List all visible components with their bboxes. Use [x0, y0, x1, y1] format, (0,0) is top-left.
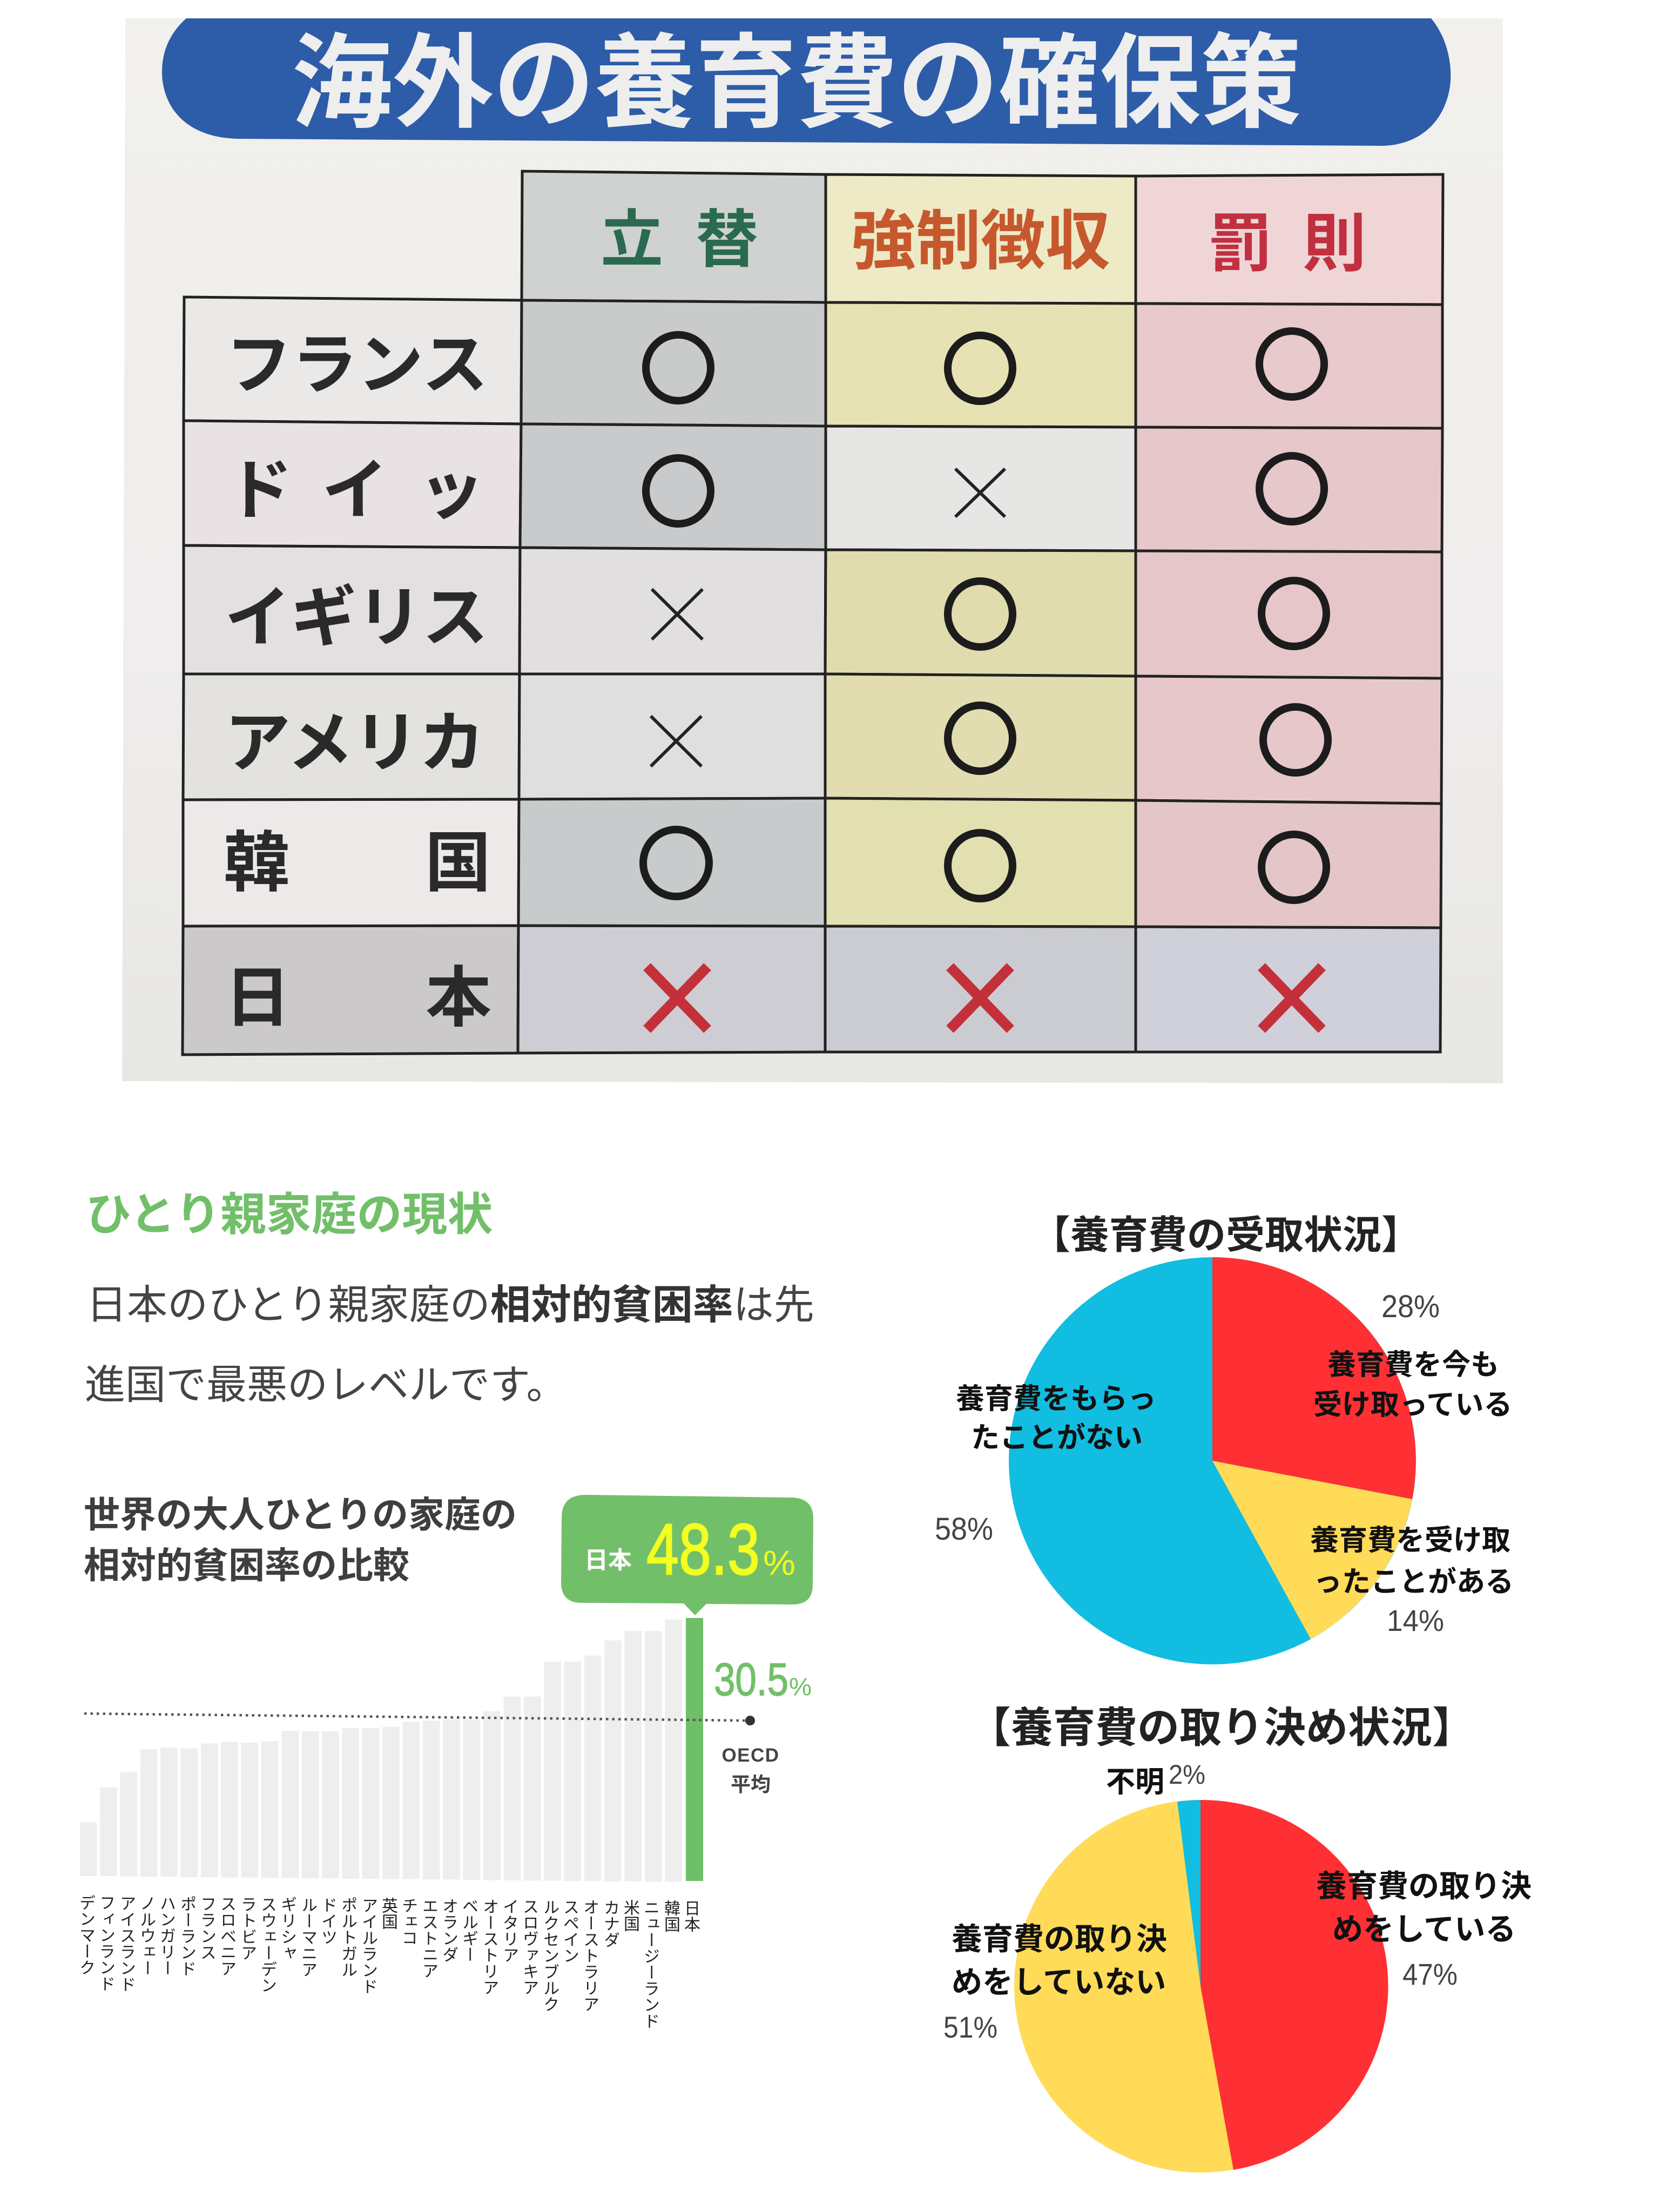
label: arranged [1316, 1862, 1532, 1949]
panel: photographed comparison table [122, 0, 1503, 1083]
country labels: ルクセンブルク [539, 1899, 563, 2012]
row label: アメリカ: アメリカ [225, 690, 485, 785]
heading: chart title [84, 1486, 517, 1589]
panel: child support arrangement status [943, 1694, 1532, 2173]
label: unknown: 不明 [1106, 1758, 1164, 1800]
country labels: スペイン [559, 1899, 583, 1964]
row label: フランス: フランス [226, 312, 488, 407]
country labels: ルーマニア [298, 1897, 321, 1978]
label: arranged: めをしている [1332, 1905, 1516, 1949]
callout: Japan 48.3%: 48.3 [646, 1509, 760, 1590]
bar chart: relative poverty rate of single-adult households [76, 1495, 813, 2029]
row label: 日本: 日 [225, 945, 291, 1040]
callout: Japan 48.3%: % [763, 1543, 795, 1582]
label: never received [956, 1376, 1156, 1456]
label: not arranged [952, 1914, 1167, 2002]
country labels: ドイツ [318, 1897, 341, 1945]
chart title: 【養育費の受取状況】 [1031, 1203, 1420, 1260]
paper background [122, 18, 1503, 1083]
country labels: チェコ [398, 1897, 422, 1946]
country labels: デンマーク [76, 1894, 99, 1975]
panel: child support receipt status [935, 1203, 1514, 1664]
country labels: ニュージーランド [640, 1899, 664, 2029]
country labels: フランス [197, 1896, 220, 1960]
label: OECD average: OECD [721, 1745, 780, 1766]
heading: chart title: 相対的貧困率の比較 [84, 1536, 409, 1589]
value: 14%: 14% [1387, 1603, 1444, 1637]
label: arranged: 養育費の取り決 [1316, 1862, 1532, 1906]
value: 47%: 47% [1402, 1957, 1458, 1991]
label: still receiving [1313, 1342, 1512, 1423]
value: 2%: 2% [1169, 1759, 1205, 1790]
Japan bar [686, 1618, 703, 1881]
value: 58%: 58% [935, 1512, 993, 1547]
country labels: オーストラリア [579, 1899, 603, 2012]
label: OECD average [721, 1745, 780, 1797]
country labels: ハンガリー [156, 1895, 180, 1976]
label: not arranged: 養育費の取り決 [952, 1914, 1167, 1959]
label: never received: たことがない [971, 1415, 1143, 1456]
label: received before: 養育費を受け取 [1310, 1518, 1510, 1559]
country labels: 米国 [620, 1899, 644, 1932]
row label: イギリス: イギリス [225, 564, 488, 660]
label: never received: 養育費をもらっ [956, 1376, 1156, 1417]
column header: 立替: 替 [696, 189, 758, 280]
label: OECD average: 平均 [731, 1768, 771, 1797]
chart title: 【養育費の取り決め状況】 [969, 1694, 1474, 1755]
country labels: ベルギー [458, 1898, 482, 1963]
country labels: 日本 [680, 1900, 704, 1932]
OECD average dotted line [84, 1714, 748, 1721]
grey country bars [80, 1620, 682, 1881]
row label: ドイツ: ド [227, 437, 293, 532]
table grid and cells [183, 171, 1443, 1055]
UK marks [652, 581, 1326, 647]
column header: 罰則: 則 [1303, 192, 1366, 284]
label: still receiving: 受け取っている [1313, 1382, 1512, 1423]
text block: intro: 進国で最悪のレベルです。 [85, 1352, 567, 1411]
country labels: ポーランド [177, 1896, 200, 1977]
country labels: ラトビア [237, 1896, 261, 1961]
row label: 日本: 本 [426, 945, 491, 1040]
label: still receiving: 養育費を今も [1327, 1342, 1499, 1383]
pie chart [1014, 1800, 1388, 2173]
country labels: スロヴァキア [519, 1898, 543, 1995]
Korea marks [643, 830, 1326, 900]
value: 51%: 51% [943, 2010, 997, 2044]
row label: ドイツ: ッ [419, 437, 484, 532]
country labels: フィンランド [96, 1894, 119, 1992]
country labels: アイルランド [358, 1897, 382, 1994]
France marks [646, 331, 1324, 401]
country labels: オーストリア [479, 1898, 503, 1995]
table marks [643, 331, 1328, 1029]
column header: 立替: 立 [601, 189, 663, 280]
heading: ひとり親家庭の現状: ひとり親家庭の現状 [86, 1178, 493, 1244]
Japan marks [647, 967, 1322, 1029]
Germany marks [646, 456, 1324, 524]
text block: intro: 日本のひとり親家庭の相対的貧困率は先 [86, 1272, 814, 1331]
OECD marker dot [745, 1716, 755, 1725]
row label: ドイツ: イ [322, 437, 388, 532]
title banner: 海外の養育費の確保策 [292, 0, 1301, 149]
label: not arranged: めをしていない [952, 1958, 1166, 2002]
country labels: ノルウェー [136, 1895, 160, 1976]
row label: 韓国: 国 [425, 810, 491, 905]
country labels: ポルトガル [338, 1897, 361, 1978]
country labels: カナダ [600, 1899, 624, 1948]
country labels [76, 1894, 704, 2029]
country labels: スロベニア [217, 1896, 240, 1977]
value: 28%: 28% [1381, 1289, 1440, 1324]
row label: 韓国: 韓 [224, 810, 289, 905]
value: 30.5%: % [789, 1673, 812, 1701]
country labels: イタリア [499, 1898, 523, 1963]
label: received before [1310, 1518, 1514, 1600]
column header: 強制徴収: 強制徴収 [851, 188, 1110, 282]
country labels: 韓国 [660, 1900, 684, 1932]
heading: chart title: 世界の大人ひとりの家庭の [84, 1486, 517, 1538]
callout: Japan 48.3%: 日本 [584, 1541, 632, 1575]
pie chart [1009, 1257, 1416, 1664]
country labels: 英国 [378, 1897, 402, 1930]
country labels: オランダ [439, 1898, 462, 1963]
callout: Japan 48.3% [561, 1495, 813, 1615]
country labels: ギリシャ [277, 1896, 301, 1961]
country labels: アイスランド [116, 1895, 140, 1992]
country labels: エストニア [419, 1898, 442, 1979]
value: 30.5%: 30.5 [714, 1654, 788, 1705]
text block: intro [85, 1272, 814, 1411]
USA marks [651, 705, 1328, 773]
label: received before: ったことがある [1313, 1559, 1514, 1600]
column header: 罰則: 罰 [1209, 192, 1272, 284]
country labels: スウェーデン [257, 1896, 281, 1993]
